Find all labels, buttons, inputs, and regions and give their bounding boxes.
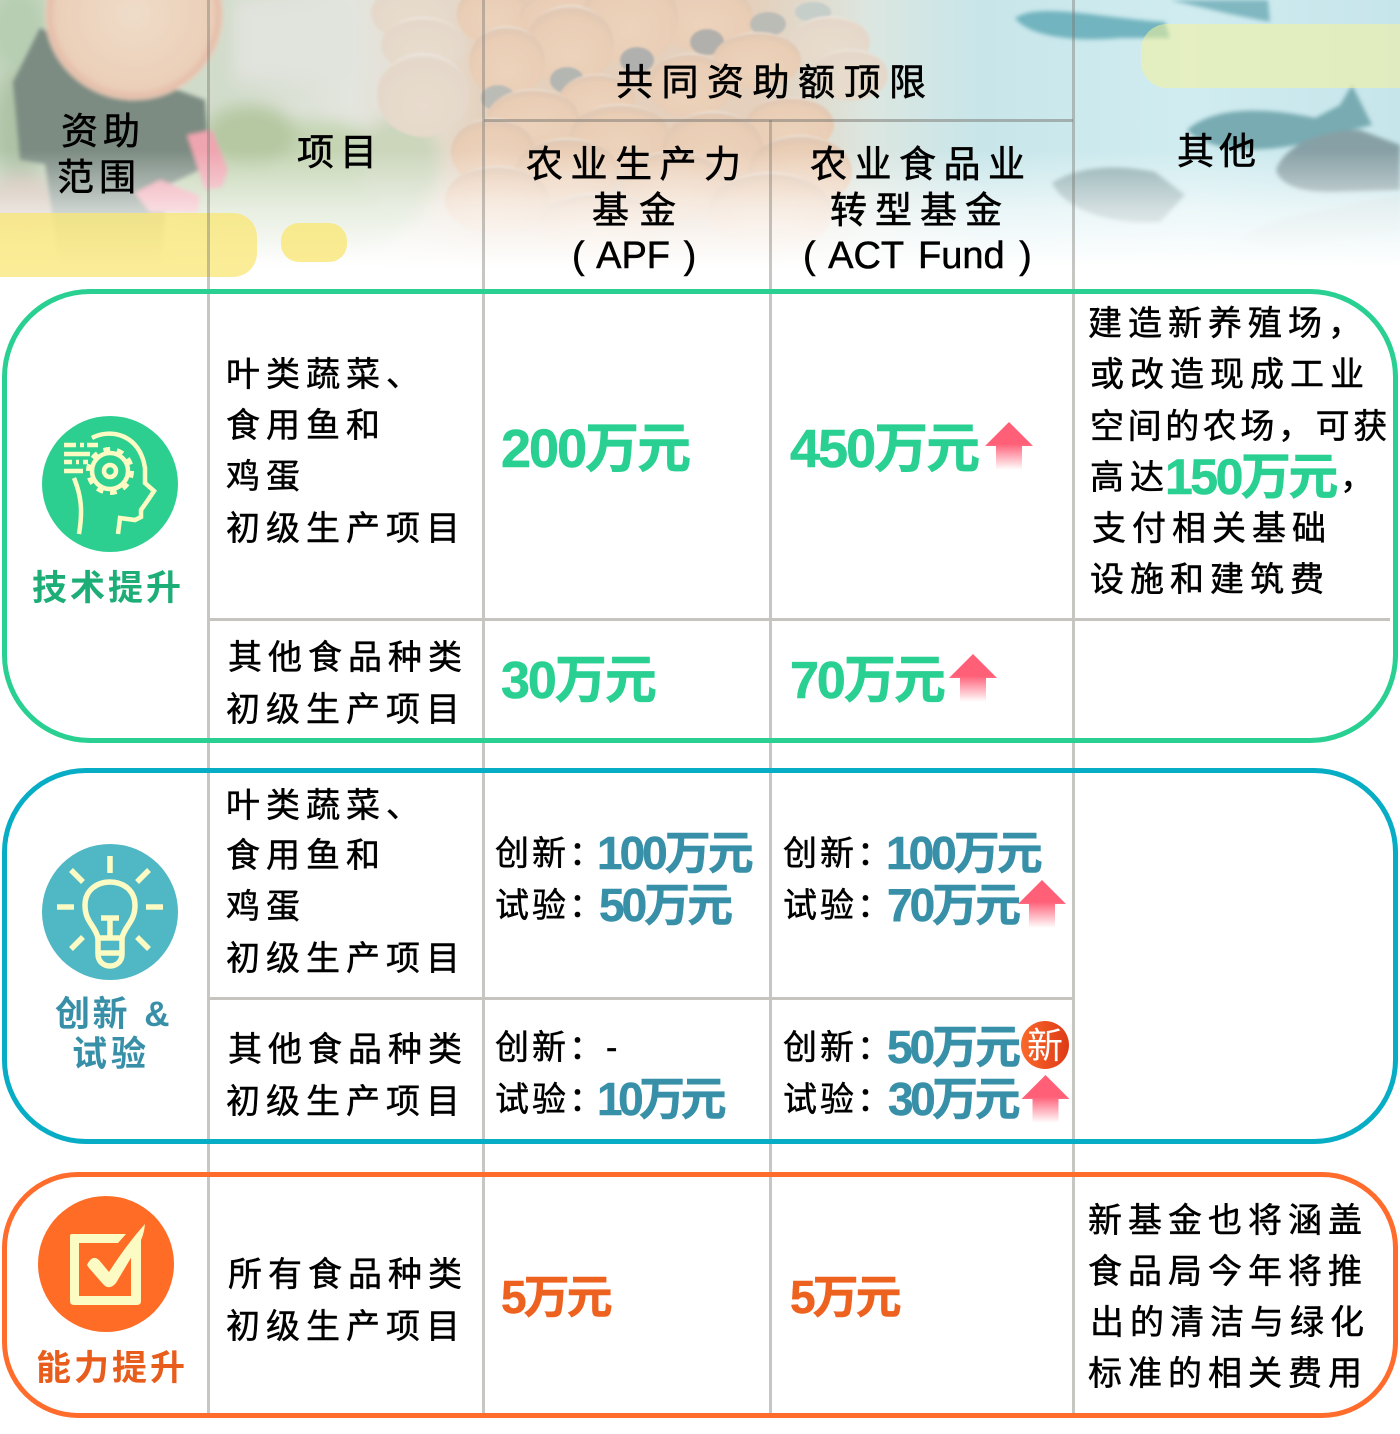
text: others capability note: 出的清洁与绿化 [1090,1304,1370,1342]
panel: technology upgrade outline [2,289,1398,743]
text: others technology note: 支付相关基础 [1092,510,1332,548]
arrow: increase [1022,1075,1070,1122]
values: ACT innovation and trial: 70万元 [887,879,1018,931]
text: leafy vegetables, fish and eggs primary production: 食用鱼和 [226,837,386,875]
yellow accent pill right [1141,24,1400,88]
heading: ACT Fund: ( ACT Fund ) [803,235,1032,277]
heading: funding scope line 2: 范围 [57,157,141,198]
panel: innovation and trial outline [2,768,1398,1144]
values: ACT innovation and trial [783,827,1042,931]
text: other food primary production: 其他食品种类 [228,639,468,677]
heading: APF: ( APF ) [572,235,696,277]
text: all food primary production: 初级生产项目 [226,1308,466,1346]
text: others technology note: 建造新养殖场， [1088,305,1368,343]
text: others capability note: 新基金也将涵盖 [1088,1202,1368,1240]
heading: co-funding cap: 共同资助额顶限 [616,62,934,103]
values: ACT other food: 试验： [783,1081,894,1119]
heading: APF: 基金 [592,190,686,231]
value: APF 300k: 30万元 [501,652,655,710]
header photo background: farm, eggs and fish [0,0,1400,252]
text: other food primary production: 初级生产项目 [226,691,466,729]
value: ACT 50k: 5万元 [790,1271,899,1323]
values: APF innovation and trial: 50万元 [599,879,730,931]
values: ACT innovation and trial: 创新： [783,835,894,873]
value: ACT 700k: 70万元 [790,652,944,710]
text: others technology note: ， [1340,459,1380,497]
text: other food primary production [226,1031,468,1121]
values: APF innovation and trial [495,827,753,931]
text: others capability note [1088,1202,1370,1393]
text: all food primary production: 所有食品种类 [228,1256,468,1294]
badge: new: 新 [1027,1025,1063,1066]
value: ACT 4.5 million: 450万元 [790,419,978,479]
heading: ACT Fund: 转型基金 [830,190,1010,231]
text: leafy vegetables, fish and eggs primary production: 鸡蛋 [226,458,306,496]
text: other food primary production [226,639,468,729]
text: other food primary production: 其他食品种类 [228,1031,468,1069]
values: APF other food: 10万元 [597,1073,722,1125]
icon: head with gear [42,416,178,552]
values: APF other food: 创新：- [495,1029,620,1067]
values: ACT innovation and trial: 100万元 [886,827,1040,879]
farmer [13,28,210,270]
text: all food primary production [226,1256,468,1346]
values: ACT other food: 30万元 [888,1073,1017,1125]
values: APF innovation and trial: 创新： [495,835,606,873]
heading: funding scope: 资助 [61,111,145,152]
value: APF 50k: 5万元 [501,1271,610,1323]
label: innovation and trial: 试验 [72,1035,150,1074]
heading: ACT Fund: 农业食品业 [810,144,1032,185]
pale eggs [371,0,455,41]
yellow accent pill small [281,223,347,262]
text: other food primary production: 初级生产项目 [226,1083,466,1121]
arrow: increase [949,654,997,700]
text: others technology note: 150万元 [1165,449,1336,505]
fish [1015,11,1170,39]
values: ACT other food [783,1021,1020,1125]
text: leafy vegetables, fish and eggs primary production: 叶类蔬菜、 [226,787,426,825]
values: APF other food [495,1029,726,1125]
text: leafy vegetables, fish and eggs primary production: 食用鱼和 [226,407,386,445]
text: leafy vegetables, fish and eggs primary production: 初级生产项目 [226,510,466,548]
heading: project: 项目 [297,132,383,173]
arrow: increase [985,422,1033,468]
tray [457,0,529,44]
values: APF other food: 试验： [495,1081,606,1119]
text: leafy vegetables, fish and eggs primary production: 初级生产项目 [226,940,466,978]
values: ACT other food: 创新： [783,1029,894,1067]
text: others technology note: 设施和建筑费 [1090,561,1330,599]
text: leafy vegetables, fish and eggs primary production: 叶类蔬菜、 [226,356,426,394]
panel: capability upgrade outline [2,1172,1398,1418]
text: others capability note: 食品局今年将推 [1088,1253,1368,1291]
text: others technology note: 或改造现成工业 [1090,356,1370,394]
text: leafy vegetables, fish and eggs primary production: 鸡蛋 [226,888,306,926]
icon: checkbox [38,1196,174,1332]
arrow: increase [1018,880,1066,926]
label: innovation and trial [55,995,172,1074]
values: ACT innovation and trial: 试验： [783,887,894,925]
text: others capability note: 标准的相关费用 [1088,1355,1368,1393]
text: leafy vegetables, fish and eggs primary production [226,356,466,548]
label: technology upgrade: 技术提升 [32,569,184,608]
icon: light bulb [42,844,178,980]
text: others technology note: 高达 [1090,459,1170,497]
yellow accent pill left [0,213,257,277]
heading: APF: 农业生产力 [526,144,748,185]
label: innovation and trial: 创新 & [55,995,172,1034]
heading: others: 其他 [1177,131,1261,172]
values: APF innovation and trial: 试验： [495,887,606,925]
values: APF innovation and trial: 100万元 [597,827,751,879]
text: others technology note [1088,305,1391,599]
value: APF 2 million: 200万元 [501,419,689,479]
badge: new [1021,1021,1069,1069]
text: leafy vegetables, fish and eggs primary production [226,787,466,978]
heading: ACT Fund [803,144,1032,277]
text: others technology note: 空间的农场，可获 [1090,408,1391,446]
heading: APF [526,144,748,277]
label: capability upgrade: 能力提升 [36,1349,188,1388]
values: ACT other food: 50万元 [887,1021,1018,1073]
